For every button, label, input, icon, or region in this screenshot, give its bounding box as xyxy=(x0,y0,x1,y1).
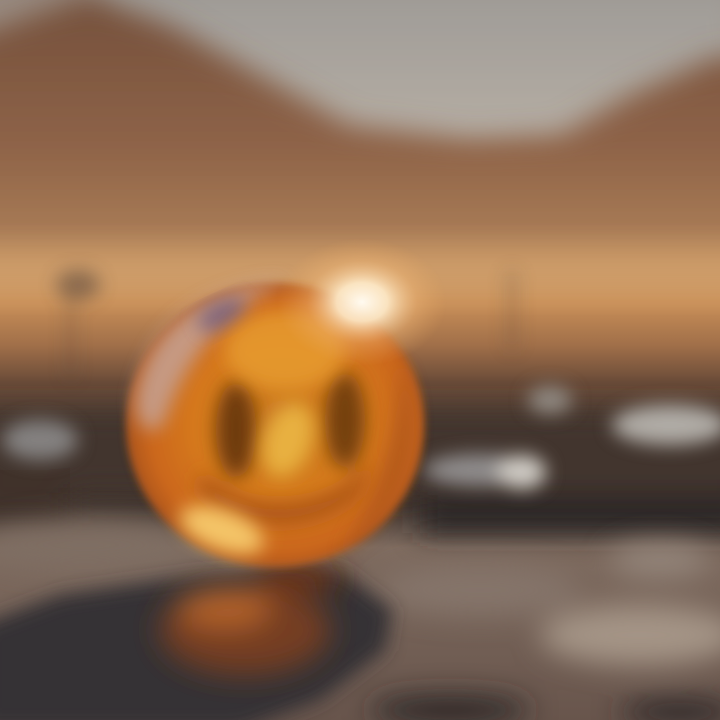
orb: inner dark ring xyxy=(200,372,375,525)
amber orb xyxy=(126,280,424,567)
ground: dark band of rocks xyxy=(0,410,720,533)
horizon glow: warm band behind the orb xyxy=(0,245,720,295)
orb: right dark edge xyxy=(340,360,414,555)
dark rock: slab under the orb xyxy=(0,570,392,720)
orb: upper-left pale rim xyxy=(135,280,290,430)
foreground: pale textured floor xyxy=(0,521,720,720)
reflection: orange glow on the rock xyxy=(160,564,342,675)
snow patches: pale blurred highlights xyxy=(2,386,720,489)
orb: violet reflection xyxy=(193,292,251,338)
orb: inner golden flare xyxy=(225,310,345,484)
silhouettes: faint posts on the horizon xyxy=(56,270,519,380)
sky: pale gap between the mountains xyxy=(100,0,720,150)
sun: bright flare at the top of the orb xyxy=(277,238,447,366)
mountains: brown ridges on the horizon xyxy=(0,0,720,270)
orb: lower-left bright highlight xyxy=(174,496,270,564)
orb body xyxy=(126,283,424,567)
